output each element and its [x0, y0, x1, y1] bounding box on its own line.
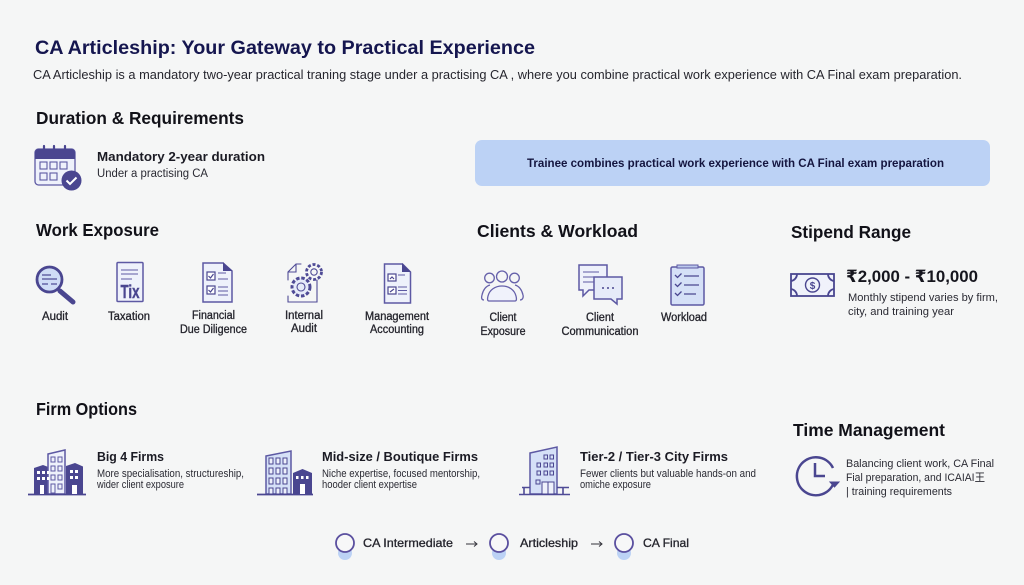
label: client communication [562, 312, 638, 338]
text: tier-2 tier-3 city firms [580, 449, 756, 491]
stipend description: city, and training year [848, 306, 954, 318]
arrow: to articleship [466, 542, 477, 546]
icon: client communication speech bubbles [579, 265, 622, 304]
panel: work exposure [36, 220, 430, 336]
label: client exposure: Exposure [480, 326, 526, 338]
step: Articleship [490, 534, 578, 560]
time management description: | training requirements [846, 486, 952, 498]
text: big 4 firms [96, 449, 244, 491]
label: taxation: Taxation [108, 311, 150, 323]
panel: firm options [28, 399, 756, 494]
label: client exposure [480, 312, 526, 338]
icon: taxation document [117, 262, 143, 302]
callout: trainee [475, 140, 990, 186]
icon: big 4 firm buildings [28, 450, 86, 494]
step: CA Final: CA Final [643, 536, 689, 550]
text: big 4 firms: More specialisation, structureship, [97, 468, 244, 480]
stipend description: Monthly stipend varies by firm, [848, 292, 998, 304]
stipend amount: ₹2,000 - ₹10,000 [846, 267, 978, 286]
step: CA Intermediate [336, 534, 453, 560]
time management description: Fial preparation, and ICAIAI王 [846, 472, 985, 484]
label: financial due diligence: Due Diligence [180, 324, 247, 336]
step: CA Intermediate: CA Intermediate [363, 536, 453, 550]
label: management accounting [365, 311, 430, 336]
stipend description [848, 292, 998, 318]
text: mid-size boutique firms: Niche expertise, focused mentorship, [322, 468, 480, 480]
heading: firm options: Firm Options [36, 399, 137, 419]
label: financial due diligence [180, 310, 247, 336]
icon: mid-size firm buildings [257, 451, 313, 494]
arrow: to CA final [591, 542, 602, 546]
label: client communication: Client [586, 312, 615, 324]
panel: stipend range [791, 222, 998, 318]
heading: time management: Time Management [793, 420, 945, 440]
label: audit: Audit [42, 311, 69, 323]
icon: banknote: $ [810, 281, 816, 292]
label: client exposure: Client [490, 312, 517, 324]
panel: clients and workload [477, 221, 707, 338]
step: Articleship: Articleship [520, 536, 578, 550]
label: internal audit: Internal [285, 310, 323, 322]
text: mid-size boutique firms: Mid-size / Boutique Firms [322, 449, 478, 464]
flow: CA pathway [336, 534, 689, 560]
heading: stipend range: Stipend Range [791, 222, 911, 242]
text: mid-size boutique firms: hooder client expertise [322, 479, 417, 491]
panel: time management [793, 420, 994, 498]
heading: work exposure: Work Exposure [36, 220, 159, 240]
time management description: Balancing client work, CA Final [846, 458, 994, 470]
intro text: CA Articleship is a mandatory two-year practical traning stage under a practising CA , where you combine practical work experience with CA Final exam preparation. [33, 68, 962, 82]
icon: calendar with check [35, 146, 82, 190]
label: financial due diligence: Financial [192, 310, 235, 322]
heading: clients and workload: Clients & Workload [477, 221, 638, 241]
icon: management accounting document [384, 263, 411, 303]
icon: taxation document: Tix [120, 282, 140, 302]
text: under a practising CA: Under a practising CA [97, 168, 208, 180]
callout: trainee: Trainee combines practical work experience with CA Final exam preparation [527, 156, 944, 170]
heading: duration and requirements: Duration & Requirements [36, 108, 244, 128]
text: big 4 firms: Big 4 Firms [97, 449, 164, 464]
text: tier-2 tier-3 city firms: Tier-2 / Tier-3 City Firms [580, 449, 728, 464]
label: client communication: Communication [562, 326, 638, 338]
text: mandatory duration: Mandatory 2-year duration [97, 149, 265, 164]
icon: workload clipboard [671, 265, 704, 305]
text: tier-2 tier-3 city firms: Fewer clients but valuable hands-on and [580, 468, 756, 480]
title: CA Articleship: Your Gateway to Practical Experience [35, 37, 535, 59]
label: management accounting: Management [365, 311, 430, 323]
icon: client group [482, 271, 523, 301]
time management description [846, 458, 994, 498]
text: mid-size boutique firms [322, 449, 480, 491]
text: tier-2 tier-3 city firms: omiche exposure [580, 479, 651, 491]
icon: clock [797, 457, 839, 495]
label: internal audit: Audit [291, 323, 318, 335]
icon: tier-2 city firm building [519, 447, 570, 494]
label: management accounting: Accounting [370, 324, 424, 336]
label: workload: Workload [661, 312, 707, 324]
icon: financial due diligence checklist [203, 262, 232, 302]
label: internal audit [285, 310, 323, 335]
icon: banknote [791, 274, 834, 296]
step: CA Final [615, 534, 689, 560]
text: big 4 firms: wider client exposure [96, 479, 184, 491]
icon: internal audit gears [288, 264, 322, 302]
icon: audit magnifier [37, 267, 73, 302]
panel: duration and requirements [35, 108, 265, 190]
